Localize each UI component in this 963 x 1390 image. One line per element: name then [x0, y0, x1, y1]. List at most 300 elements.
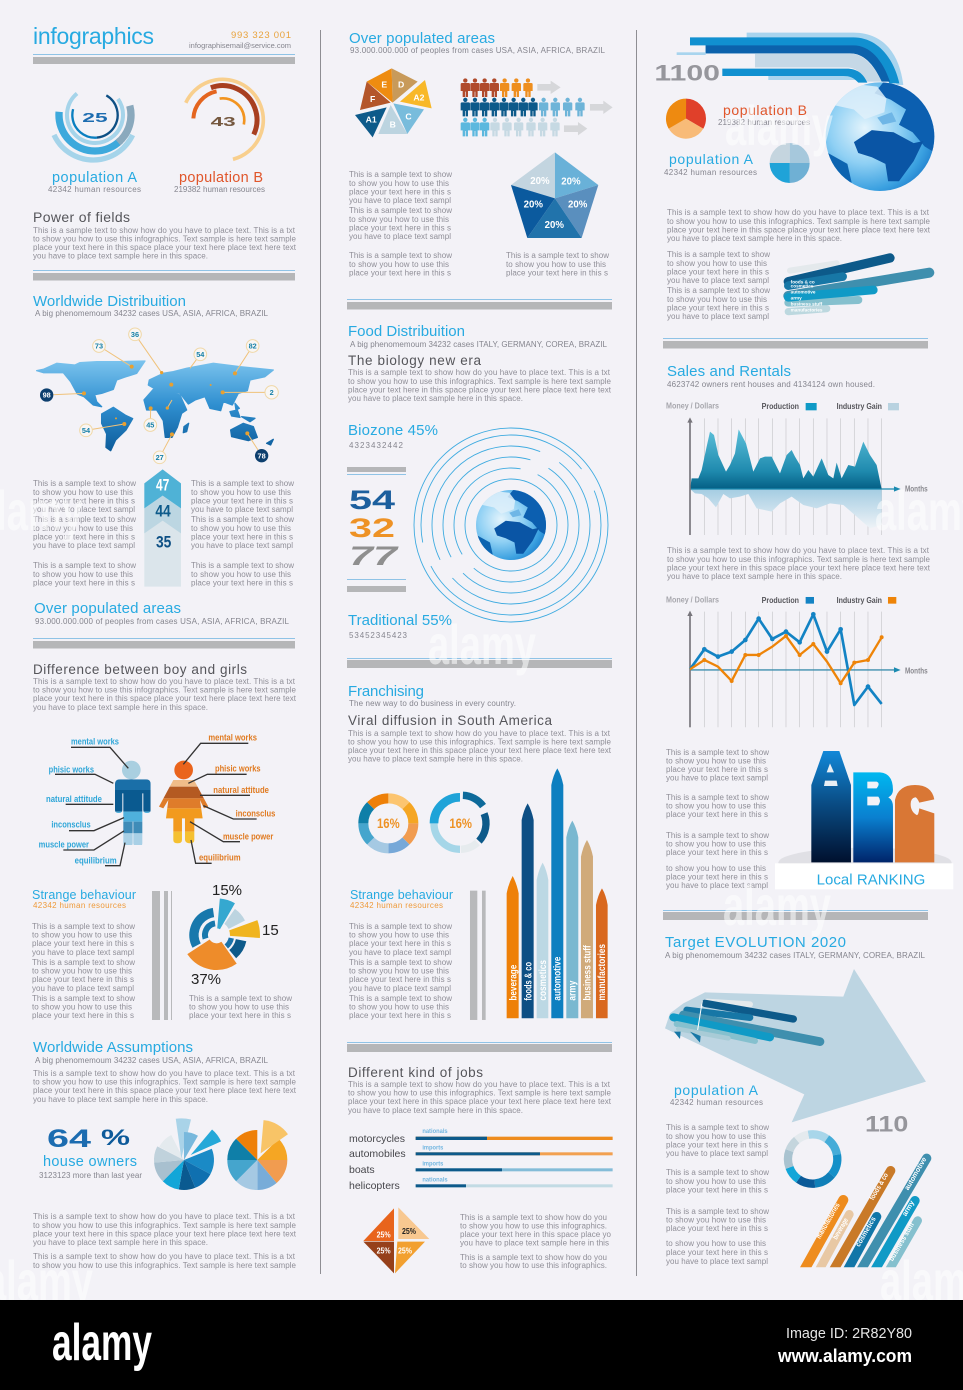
text block: food distribuition: A big phenomemoum 34232 cases ITALY, GERMANY, COREA, BRAZIL — [350, 340, 608, 349]
stat: numbers 54 32 77: 32 — [349, 513, 395, 543]
chart: angled rounded bars: army — [791, 295, 802, 300]
text block: franchising: to show you how to use this infographics. Text sample is here text sample — [348, 738, 612, 746]
text block: sales para: you have to place text sample here in this space. — [667, 572, 842, 581]
text block: strange behaviour: to show you how to use this — [32, 930, 132, 940]
text block: ranking notes — [666, 748, 769, 890]
label: population A (column 3): 42342 human resources — [664, 168, 757, 177]
text block: franchising — [348, 683, 612, 764]
text block: pentagon note: This is a sample text to show — [506, 251, 609, 260]
text block: sales para: to show you how to use this infographics. Text sample is here text sample — [667, 555, 931, 564]
text block: right narrow: place your text here in this s — [191, 578, 293, 588]
footer: credit bar — [0, 1300, 963, 1390]
chart: boy and girl figures with labels: equilibrium — [75, 856, 117, 866]
text block: column 1 footer: This is a sample text to show how do you have to place text. This is a txt — [33, 1212, 296, 1221]
text block: pentagon note: place your text here in this s — [506, 268, 608, 278]
donut: blue — [778, 1124, 847, 1194]
label: 16 percent: 16% — [377, 815, 400, 831]
text block: strange behaviour: This is a sample text to show — [32, 994, 135, 1003]
text block: food distribuition: The biology new era — [348, 353, 481, 368]
text block: strange behaviour (column 2): 42342 human resources — [350, 901, 443, 910]
chart: world map with callouts: 98 — [43, 391, 51, 400]
chart: world map with callouts: 36 — [131, 330, 139, 339]
label: population B (column 3): population B — [723, 102, 807, 118]
text block: column 3 narrow: This is a sample text to show — [667, 250, 770, 259]
chart: line chart: Money / Dollars — [666, 596, 719, 605]
text block: pie note: place your text here in this s — [189, 1011, 291, 1020]
heading: over populated areas: 93.000.000.000 of peoples from cases USA, ASIA, AFRICA, BRAZIL — [35, 617, 290, 626]
text block: worldwide assumptions: Worldwide Assumptions — [33, 1039, 193, 1056]
chart: stacked arrow 47 44 35: 44 — [155, 502, 171, 521]
text block: target notes: to show you how to use this — [666, 1216, 766, 1224]
chart: job bars: boats — [349, 1164, 375, 1176]
text block: right narrow: This is a sample text to show — [191, 479, 294, 488]
text block: franchising: This is a sample text to show how do you have to place text. This is a txt — [348, 729, 611, 738]
chart: world map with callouts: 54 — [196, 350, 205, 359]
text block: target notes: to show you how to use this — [666, 1239, 766, 1248]
panel: population gauges — [36, 59, 277, 194]
text block: column 3 narrow: to show you how to use this — [667, 259, 767, 268]
chart: diamond 25 percent — [363, 1207, 429, 1273]
chart: job bars: motorcycles — [349, 1133, 405, 1145]
stat: 64 percent house owners: % — [101, 1125, 130, 1150]
text block: difference between boy and girls: place your text here in this space place your text here place text here text — [33, 694, 297, 703]
text block: strange behaviour (column 2): place your text here in this s — [349, 975, 451, 984]
chart: lettered pentagon — [355, 68, 432, 137]
text block: right narrow: you have to place text sampl — [191, 505, 293, 514]
website: www.alamy.com — [777, 1346, 912, 1366]
text block: franchising: you have to place text sample here in this space. — [348, 754, 523, 764]
text block: column 3 narrow: place your text here in this s — [667, 268, 769, 276]
heading: worldwide distribuition: A big phenomemoum 34232 cases USA, ASIA, AFRICA, BRAZIL — [35, 309, 269, 318]
text block: worldwide assumptions — [33, 1039, 297, 1104]
text block: food distribuition — [348, 323, 612, 403]
stat: numbers 54 32 77: 77 — [349, 541, 400, 571]
chart: exploded pie — [180, 899, 253, 971]
label: population A (column 3) — [664, 151, 757, 177]
heading: over populated areas: Over populated areas — [34, 600, 181, 617]
text block: target notes: to show you how to use this — [666, 1132, 766, 1141]
text block: target notes: place your text here in this s — [666, 1248, 768, 1257]
chart: line chart — [666, 596, 928, 727]
chart: boy and girl figures with labels: inconsclus — [236, 808, 275, 818]
chart: boy and girl figures with labels: natural attitude — [46, 794, 102, 804]
chart: curved bars with globe — [654, 33, 940, 191]
text block: ranking notes: place your text here in this s — [666, 848, 768, 857]
chart: arrow bars: army — [567, 980, 578, 1001]
chart: line chart: Months — [905, 666, 928, 675]
chart: arrow bars: foods & co — [523, 962, 534, 1001]
chart: arrow bars: beverage — [508, 964, 519, 1001]
label: population A — [48, 170, 141, 194]
label: population A (target) — [670, 1082, 763, 1107]
chart: angled rounded bars: business stuff — [791, 301, 823, 306]
gauge: population A: 25 — [82, 110, 109, 125]
text block: left narrow: you have to place text sampl — [33, 541, 135, 550]
text block: strange behaviour: This is a sample text to show — [32, 958, 135, 967]
heading: over populated areas (column 2): Over populated areas — [349, 30, 495, 47]
chart: diagonal bars — [803, 1158, 927, 1272]
chart: world map with callouts: 2 — [270, 388, 274, 397]
label: population B: population B — [179, 170, 263, 186]
text block: power of fields: you have to place text sample here in this space. — [33, 252, 208, 260]
text block: column 3 narrow: you have to place text sampl — [667, 276, 769, 285]
text block: food distribuition: to show you how to use this infographics. Text sample is here text sample — [348, 377, 612, 386]
chart: world map with callouts — [37, 328, 278, 464]
label: population B: 219382 human resources — [174, 185, 265, 194]
text block: column 3 narrow: place your text here in this s — [667, 304, 769, 312]
label: 37%: 37% — [191, 971, 221, 988]
text block: column 3 top — [667, 208, 931, 243]
text block: power of fields: Power of fields — [33, 209, 130, 225]
text block: worldwide assumptions: to show you how to use this infographics. Text sample is here text sample — [33, 1078, 297, 1086]
text block: column 2 narrow top: you have to place text sampl — [349, 196, 451, 205]
icon: girl figure — [157, 761, 210, 845]
text block: strange behaviour: place your text here in this s — [32, 1011, 134, 1020]
text block: right narrow: you have to place text sampl — [191, 541, 293, 550]
chart: big arrow with bars: manufactories — [814, 1201, 842, 1240]
image id: Image ID: 2R82Y80 — [786, 1325, 912, 1342]
chart: boy and girl figures with labels: muscle power — [223, 832, 274, 842]
chart: stacked arrow 47 44 35: 47 — [156, 476, 169, 495]
chart: big arrow with bars: beverage — [831, 1216, 850, 1241]
stat: 64 percent house owners: 3123123 more than last year — [39, 1171, 142, 1180]
text block: ranking notes: place your text here in this s — [666, 810, 768, 819]
text block: strange behaviour (column 2): This is a sample text to show — [349, 922, 452, 931]
text block: column 3 top: to show you how to use this infographics. Text sample is here text sample — [667, 217, 931, 226]
text block: column 1 footer: you have to place text sample here in this space. — [33, 1238, 208, 1247]
text block: column 3 narrow: This is a sample text to show — [667, 286, 770, 295]
text block: strange behaviour (column 2) — [349, 888, 453, 1020]
label: population A: 42342 human resources — [48, 185, 141, 194]
chart: concentric rings with globe — [414, 428, 608, 622]
text block: diamond note: This is a sample text to show how do you — [460, 1213, 607, 1222]
watermark overlays: alamy — [723, 874, 831, 937]
text block: target notes: This is a sample text to show — [666, 1168, 769, 1177]
text block: strange behaviour (column 2): This is a sample text to show — [349, 994, 452, 1003]
chart: arrow bars: cosmetics — [538, 960, 549, 1001]
text block: column 3 top: place your text here in this space place your text here place text here text — [667, 226, 931, 234]
chart: ABC local ranking: Local RANKING — [817, 872, 925, 889]
label: 15%: 15% — [212, 882, 242, 899]
chart: lettered pentagon: C — [405, 111, 412, 121]
text block: worldwide assumptions: place your text here in this space place your text here place text here text — [33, 1086, 297, 1095]
label: population A (target): 42342 human resources — [670, 1098, 763, 1107]
text block: right narrow: to show you how to use this — [191, 488, 291, 497]
text block: pie note — [189, 994, 292, 1020]
text block: strange behaviour (column 2): place your text here in this s — [349, 1011, 451, 1020]
stat: traditional — [348, 612, 452, 640]
text block: target notes: place your text here in this s — [666, 1140, 768, 1150]
text block: strange behaviour: you have to place text sampl — [32, 984, 134, 993]
chart: arrow bars: automotive — [553, 956, 564, 1001]
chart: lettered pentagon: F — [370, 94, 375, 104]
chart: job bars: imports — [422, 1161, 444, 1167]
watermark overlays: alamy — [428, 613, 536, 676]
text block: different kind of jobs: Different kind of jobs — [348, 1065, 483, 1080]
text block: franchising: place your text here in this space place your text here place text here text — [348, 746, 612, 755]
text block: pentagon note — [506, 251, 609, 278]
text block: strange behaviour: place your text here in this s — [32, 975, 134, 984]
text block: strange behaviour (column 2): Strange behaviour — [350, 888, 453, 902]
text block: worldwide assumptions: This is a sample text to show how do you have to place text. This is a txt — [33, 1069, 296, 1078]
text block: worldwide assumptions: you have to place text sample here in this space. — [33, 1095, 208, 1104]
text block: ranking notes: to show you how to use this — [666, 756, 766, 766]
text block: franchising: The new way to do business in every country. — [349, 699, 516, 708]
chart: big arrow with bars — [665, 969, 928, 1272]
pie: blue — [159, 1132, 214, 1181]
heading: target evolution: A big phenomemoum 34232 cases ITALY, GERMANY, COREA, BRAZIL — [665, 951, 926, 960]
text block: strange behaviour (column 2): to show you how to use this — [349, 966, 449, 976]
text block: strange behaviour: place your text here in this s — [32, 939, 134, 948]
label: 16 percent — [377, 815, 472, 831]
text block: target notes: place your text here in this s — [666, 1224, 768, 1233]
text block: ranking notes: you have to place text sampl — [666, 881, 768, 890]
stat: traditional: 53452345423 — [349, 631, 408, 640]
text block: column 2 narrow top: to show you how to use this — [349, 215, 449, 224]
chart: lettered pentagon: A1 — [366, 115, 377, 125]
text block: target notes: This is a sample text to show — [666, 1207, 769, 1216]
text block: food distribuition: Food Distribuition — [348, 323, 465, 340]
text block: diamond note: to show you how to use this infographics. — [460, 1261, 607, 1270]
text block: right narrow: place your text here in this s — [191, 496, 293, 506]
text block: column 1 footer: to show you how to use this infographics. Text sample is here text sample — [33, 1221, 297, 1230]
stat: biozone — [348, 422, 438, 450]
text block: right narrow: This is a sample text to show — [191, 515, 294, 524]
icon: globe — [823, 80, 940, 191]
pie: blue quarters — [780, 153, 800, 173]
text block: difference between boy and girls: you have to place text sample here in this space. — [33, 703, 208, 712]
stat: 64 percent house owners: 64 — [47, 1125, 91, 1153]
text block: pie note: This is a sample text to show — [189, 994, 292, 1003]
text block: ranking notes: place your text here in this s — [666, 765, 768, 774]
text block: column 2 narrow top: This is a sample text to show — [349, 206, 452, 215]
chart: pentagon 20 percent: 20% — [524, 200, 543, 211]
text block: franchising: Viral diffusion in South America — [348, 713, 552, 728]
chart: big arrow with bars: army — [900, 1198, 916, 1218]
chart: boy and girl figures with labels — [39, 733, 275, 866]
chart: world map with callouts: 73 — [95, 342, 103, 351]
label: population B — [174, 170, 265, 194]
text block: ranking notes: to show you how to use this — [666, 840, 766, 848]
chart: stacked arrow 47 44 35 — [144, 469, 181, 587]
chart: lettered pentagon: A2 — [413, 93, 425, 103]
chart: area chart: Production — [762, 402, 799, 411]
text block: strange behaviour — [32, 888, 136, 1020]
stat: 64 percent house owners: house owners — [43, 1154, 137, 1170]
label: 15: 15 — [262, 922, 279, 939]
text block: column 3 narrow — [667, 250, 770, 321]
text block: right narrow: place your text here in this s — [191, 532, 293, 542]
text block: difference between boy and girls: Difference between boy and girls — [33, 662, 247, 677]
chart: boy and girl figures with labels: mental works — [208, 733, 257, 743]
chart: lettered pentagon: E — [381, 79, 387, 89]
text block: left narrow: place your text here in this s — [33, 532, 135, 542]
text block: ranking notes: to show you how to use this — [666, 802, 766, 810]
chart: world map with callouts: 82 — [249, 342, 257, 351]
chart: arrow bars: manufactories — [597, 944, 608, 1001]
text block: power of fields: to show you how to use this infographics. Text sample is here text sample — [33, 234, 297, 244]
text block: ranking notes: This is a sample text to show — [666, 793, 769, 802]
text block: column 1 footer: This is a sample text to show how do you have to place text. This is a txt — [33, 1252, 296, 1261]
chart: pentagon 20 percent: 20% — [545, 220, 564, 231]
text block: column 2 narrow top — [349, 170, 452, 278]
chart: lettered pentagon: B — [390, 119, 396, 129]
text block: left narrow: to show you how to use this — [33, 488, 133, 497]
chart: angled rounded bars: cosmetics — [791, 283, 814, 288]
chart: donuts and arrow bars — [353, 768, 608, 1020]
text block: right narrow — [191, 479, 294, 588]
text block: column 3 narrow: to show you how to use this — [667, 295, 767, 304]
text block: franchising: Franchising — [348, 683, 424, 700]
chart: world map with callouts: 27 — [156, 453, 164, 462]
text block: target notes: you have to place text sampl — [666, 1149, 768, 1158]
text block: difference between boy and girls: to show you how to use this infographics. Text sample is here text sample — [33, 686, 297, 694]
text block: ranking notes: This is a sample text to show — [666, 748, 769, 757]
text block: strange behaviour: to show you how to use this — [32, 1002, 132, 1012]
text block: strange behaviour: you have to place text sampl — [32, 948, 134, 957]
text block: difference between boy and girls: This is a sample text to show how do you have to place text. This is a txt — [33, 677, 296, 686]
chart: job bars: imports — [422, 1146, 444, 1152]
chart: boy and girl figures with labels: inconsclus — [51, 820, 91, 830]
text block: difference between boy and girls — [33, 662, 297, 712]
text block: target notes: you have to place text sampl — [666, 1257, 768, 1266]
chart: world map with callouts: 54 — [82, 426, 91, 435]
text block: column 2 narrow top: place your text here in this s — [349, 268, 451, 278]
text block: sales para: place your text here in this space place your text here place text here text — [667, 564, 931, 572]
panel: column 1 header — [33, 23, 295, 64]
watermark overlays: alamy — [725, 94, 833, 157]
heading: worldwide distribuition — [33, 293, 269, 318]
text block: power of fields: place your text here in this space place your text here place text here text — [33, 243, 297, 252]
text block: right narrow: This is a sample text to show — [191, 561, 294, 570]
label: population A: population A — [52, 170, 137, 186]
text block: column 2 narrow top: This is a sample text to show — [349, 170, 452, 179]
chart: angled rounded bars: automotive — [791, 289, 816, 294]
text block: column 3 top: you have to place text sample here in this space. — [667, 234, 842, 243]
chart: big arrow with bars: foods & co — [867, 1171, 890, 1202]
chart: boy and girl figures with labels: phisic works — [49, 764, 94, 774]
text block: left narrow: to show you how to use this — [33, 570, 133, 579]
text block: power of fields: This is a sample text to show how do you have to place text. This is a txt — [33, 226, 296, 235]
donut: left 16% — [353, 788, 424, 859]
text block: column 3 narrow: you have to place text sampl — [667, 312, 769, 321]
chart: angled rounded bars: foods & co — [791, 279, 815, 284]
text block: left narrow: place your text here in this s — [33, 578, 135, 588]
gauge: population B — [169, 66, 277, 174]
text block: worldwide assumptions: A big phenomemoum 34232 cases USA, ASIA, AFRICA, BRAZIL — [35, 1056, 269, 1065]
chart: arrow bars — [507, 768, 608, 1018]
text block: target notes: This is a sample text to show — [666, 1123, 769, 1132]
chart: area chart: Money / Dollars — [666, 402, 719, 411]
heading: over populated areas — [34, 600, 290, 626]
heading: sales and rentals: 4623742 owners rent houses and 4134124 own housed. — [667, 380, 875, 389]
chart: world map with callouts: 45 — [146, 421, 154, 430]
chart: people pictogram — [461, 78, 613, 136]
stat: 1100: 1100 — [654, 61, 720, 86]
heading: target evolution — [665, 934, 926, 960]
text block: column 2 narrow top: to show you how to use this — [349, 179, 449, 188]
text block: ranking notes: place your text here in this s — [666, 872, 768, 882]
text block: strange behaviour: Strange behaviour — [32, 888, 136, 902]
text block: column 2 narrow top: This is a sample text to show — [349, 251, 452, 260]
pie: orange — [672, 105, 700, 132]
title: infographics — [33, 23, 154, 49]
text block: strange behaviour: 42342 human resources — [33, 901, 126, 910]
icon: boy figure — [115, 760, 151, 845]
chart: area chart: Industry Gain — [837, 402, 882, 411]
label: population A (target): population A — [674, 1082, 759, 1098]
text block: diamond note: to show you how to use this infographics. — [460, 1222, 607, 1230]
chart: ABC local ranking — [775, 751, 953, 889]
chart: pentagon 20 percent: 20% — [568, 200, 588, 211]
chart: diamond 25 percent: 25% — [377, 1246, 391, 1255]
text block: column 2 narrow top: place your text here in this s — [349, 224, 451, 232]
text block: strange behaviour (column 2): you have to place text sampl — [349, 984, 451, 993]
heading: worldwide distribuition: Worldwide Distribuition — [33, 293, 186, 310]
chart: pentagon 20 percent: 20% — [530, 176, 550, 187]
chart: area chart — [666, 402, 928, 535]
chart: boy and girl figures with labels: muscle power — [39, 839, 89, 849]
text block: diamond note: place your text here in this space place yo — [460, 1230, 612, 1239]
text block: strange behaviour: This is a sample text to show — [32, 922, 135, 931]
text block: target notes — [666, 1123, 769, 1266]
text block: strange behaviour (column 2): to show you how to use this — [349, 930, 449, 940]
text block: ranking notes: you have to place text sampl — [666, 774, 768, 782]
stat: biozone: Biozone 45% — [348, 422, 438, 439]
chart: pentagon 20 percent: 20% — [561, 177, 581, 188]
text block: left narrow: to show you how to use this — [33, 524, 133, 533]
chart: angled rounded bars: manufactories — [791, 308, 823, 313]
text block: right narrow: to show you how to use this — [191, 524, 291, 533]
text block: different kind of jobs: you have to place text sample here in this space. — [348, 1106, 523, 1115]
text block: strange behaviour (column 2): to show you how to use this — [349, 1002, 449, 1012]
chart: line chart: Production — [762, 596, 799, 605]
text block: different kind of jobs: to show you how to use this infographics. Text sample is here text sample — [348, 1088, 612, 1098]
text block: strange behaviour: to show you how to use this — [32, 966, 132, 976]
text block: strange behaviour (column 2): you have to place text sampl — [349, 948, 451, 957]
heading: target evolution: Target EVOLUTION 2020 — [665, 934, 846, 951]
text block: different kind of jobs: This is a sample text to show how do you have to place text. This is a txt — [348, 1080, 611, 1089]
chart: stacked arrow 47 44 35: 35 — [156, 532, 171, 551]
text block: food distribuition: place your text here in this space place your text here place text here text — [348, 386, 612, 394]
chart: arrow bars: business stuff — [583, 945, 594, 1001]
chart: world map with callouts: 78 — [258, 451, 266, 460]
text block: left narrow: This is a sample text to show — [33, 561, 136, 570]
text block: column 3 top: This is a sample text to show how do you have to place text. This is a txt — [667, 208, 930, 217]
text block: column 1 footer: to show you how to use this infographics. Text sample is here text sample — [33, 1261, 297, 1270]
text block: left narrow: This is a sample text to show — [33, 479, 136, 488]
email: infographisemail@service.com — [189, 41, 291, 50]
text block: different kind of jobs — [348, 1065, 612, 1115]
chart: boy and girl figures with labels: phisic works — [215, 763, 261, 773]
text block: left narrow: you have to place text sampl — [33, 505, 135, 514]
chart: diamond 25 percent: 25% — [377, 1230, 391, 1239]
text block: target notes: place your text here in this s — [666, 1186, 768, 1194]
text block: sales para — [667, 546, 931, 581]
text block: target notes: to show you how to use this — [666, 1177, 766, 1186]
chart: area chart: Months — [905, 485, 928, 494]
text block: diamond note — [460, 1213, 612, 1270]
pie: orange and blue — [236, 1135, 279, 1181]
stat: biozone: 4323432442 — [349, 441, 404, 450]
chart: boy and girl figures with labels: natural attitude — [213, 785, 269, 795]
text block: food distribuition: This is a sample text to show how do you have to place text. This is a txt — [348, 368, 611, 377]
label: 16 percent: 16% — [449, 815, 472, 831]
chart: big arrow with bars: business stuff — [887, 1220, 916, 1263]
stat: 64 percent house owners — [39, 1125, 142, 1180]
chart: job bars: automobiles — [349, 1148, 406, 1160]
text block: left narrow: This is a sample text to show — [33, 515, 136, 524]
